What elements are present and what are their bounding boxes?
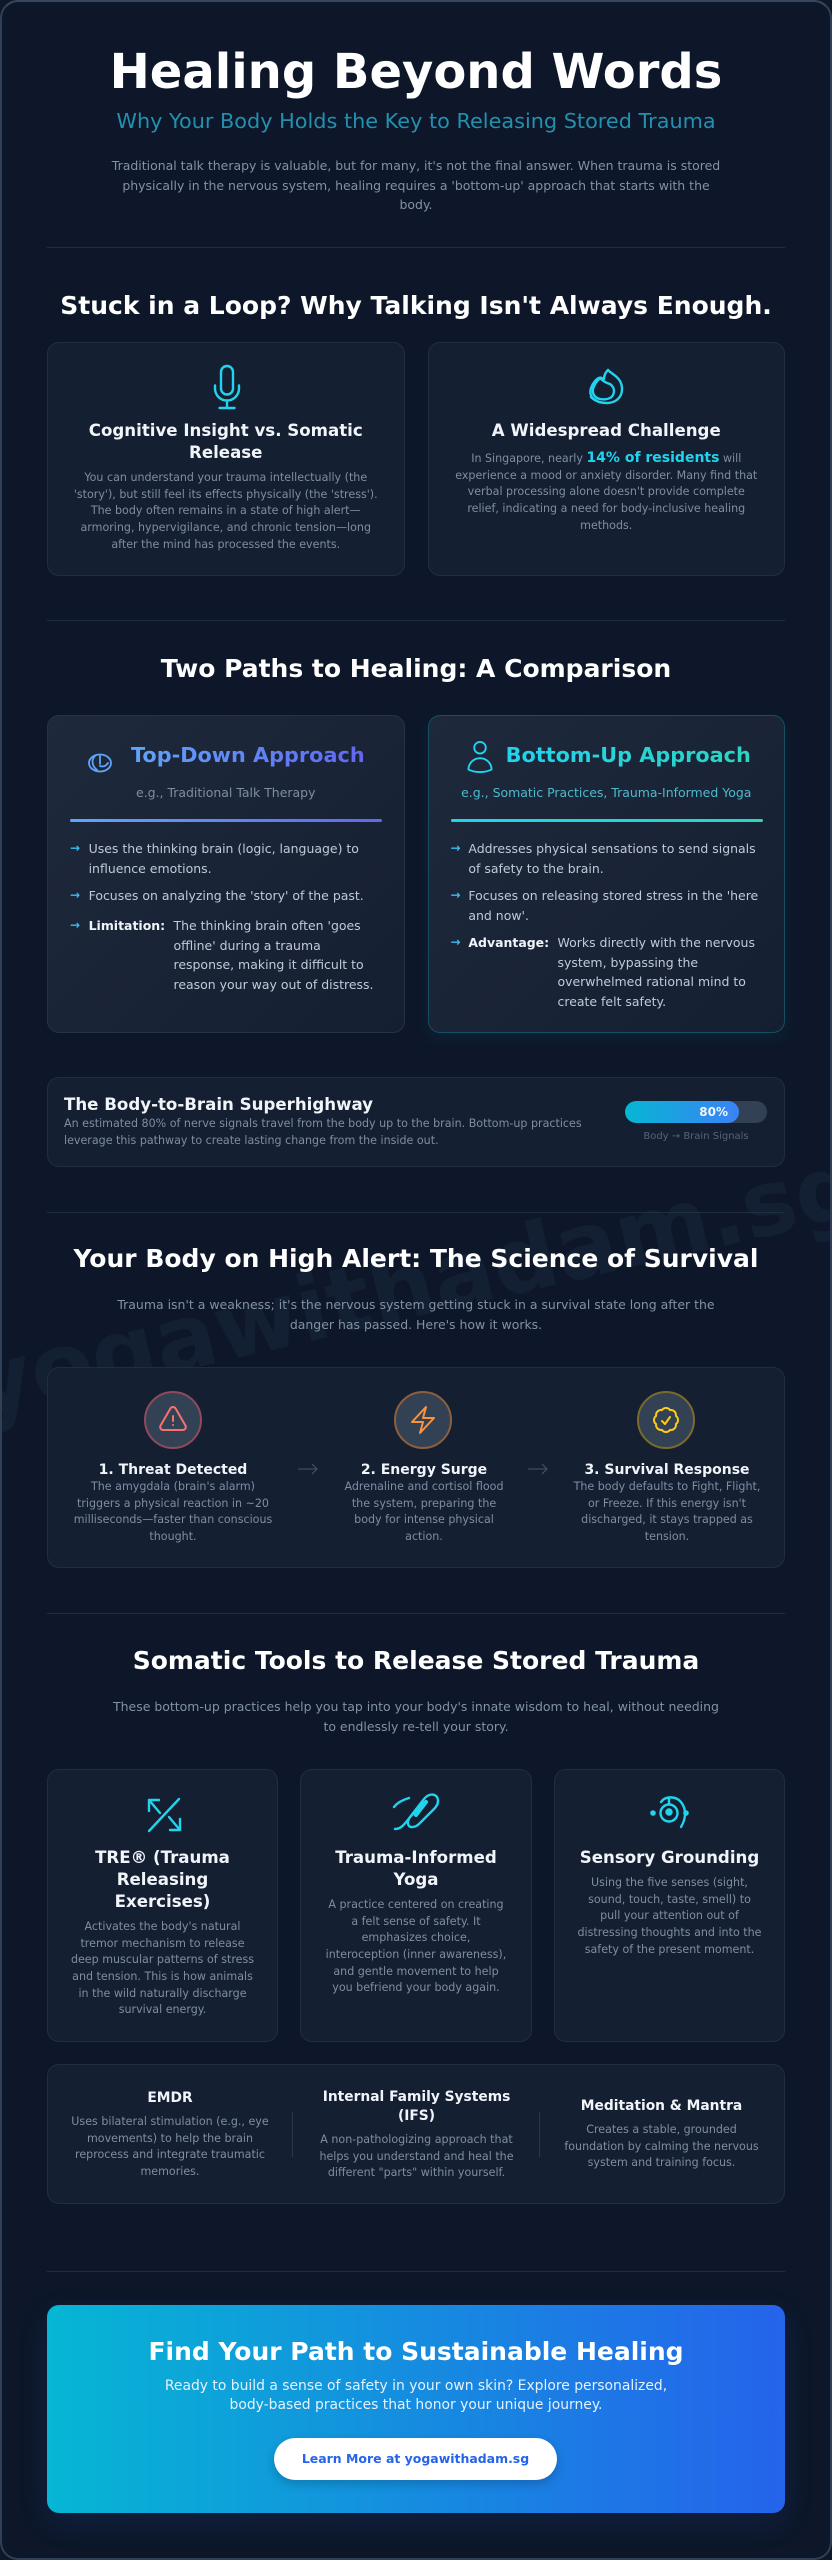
modality title: (IFS) <box>398 2108 435 2124</box>
modality text <box>319 2133 514 2179</box>
tool text: and tension. This is how animals <box>72 1970 253 1983</box>
list: → <box>70 888 80 902</box>
step text: Adrenaline and cortisol flood <box>344 1480 504 1493</box>
step text <box>74 1480 272 1543</box>
modality text <box>71 2115 269 2178</box>
tool text: pull your attention out of <box>600 1909 739 1922</box>
card text: methods. <box>580 519 632 532</box>
list: Focuses on analyzing the 'story' of the past. <box>89 888 364 903</box>
heading: high alert: Your Body on High Alert: The Science of Survival <box>74 1244 758 1273</box>
step text: triggers a physical reaction in ~20 <box>77 1497 269 1510</box>
tool text: interoception (inner awareness), <box>326 1948 506 1961</box>
tool title: Sensory Grounding <box>580 1848 759 1867</box>
tool title: Yoga <box>393 1870 439 1889</box>
list: Advantage: <box>468 935 549 950</box>
step 2 <box>344 1391 504 1543</box>
step text: body for intense physical <box>354 1513 494 1526</box>
tool text: Activates the body's natural <box>85 1920 240 1933</box>
tool text: a felt sense of safety. It <box>351 1915 481 1928</box>
panel: trauma-informed yoga <box>300 1769 532 2042</box>
modality text: Uses bilateral stimulation (e.g., eye <box>71 2115 269 2128</box>
card text <box>74 471 378 551</box>
step title: 3. Survival Response <box>584 1462 750 1478</box>
list: → <box>450 935 461 949</box>
tool text: safety of the present moment. <box>585 1943 754 1956</box>
tool text: emphasizes choice, <box>362 1931 470 1944</box>
modality title: EMDR <box>147 2090 193 2106</box>
modality title: Meditation & Mantra <box>581 2098 742 2114</box>
panel: survival process <box>47 1367 785 1568</box>
approach subtitle: e.g., Somatic Practices, Trauma-Informed Yoga <box>461 785 751 800</box>
cta heading: Find Your Path to Sustainable Healing <box>148 2337 684 2366</box>
tool title: Releasing <box>117 1870 208 1889</box>
list <box>70 841 373 992</box>
icon: bolt <box>394 1391 452 1449</box>
cta text <box>165 2378 667 2413</box>
step text: The amygdala (brain's alarm) <box>91 1480 255 1493</box>
panel: sensory grounding <box>554 1769 785 2042</box>
tool text <box>71 1920 254 2016</box>
tool text: deep muscular patterns of stress <box>71 1953 254 1966</box>
modality text: A non-pathologizing approach that <box>320 2133 513 2146</box>
modality text: memories. <box>140 2165 200 2178</box>
bar caption: Body → Brain Signals <box>643 1131 749 1142</box>
modality title: Internal Family Systems <box>323 2089 510 2105</box>
card text: You can understand your trauma intellectually (the <box>84 471 367 484</box>
step text: or Freeze. If this energy isn't <box>588 1497 746 1510</box>
step 3 <box>574 1391 760 1543</box>
modality text: system and training focus. <box>588 2156 735 2169</box>
icon: user <box>468 741 492 773</box>
somatic tools intro: These bottom-up practices help you tap into your body's innate wisdom to heal, without needing <box>113 1699 719 1714</box>
list: → <box>450 888 461 902</box>
card text <box>455 450 757 532</box>
intro text: Traditional talk therapy is valuable, but for many, it's not the final answer. When trauma is stored <box>112 158 720 173</box>
list: → <box>70 918 80 932</box>
panel: body-to-brain superhighway <box>47 1077 785 1167</box>
high alert intro: danger has passed. Here's how it works. <box>290 1316 542 1332</box>
superhighway text: An estimated 80% of nerve signals travel from the body up to the brain. Bottom-up practices <box>64 1117 582 1130</box>
icon: brain <box>88 754 112 772</box>
step text: thought. <box>149 1530 197 1543</box>
icon: warning <box>144 1391 202 1449</box>
heading: stuck in a loop: Stuck in a Loop? Why Talking Isn't Always Enough. <box>60 291 772 320</box>
approach heading: Bottom-Up Approach <box>506 743 751 767</box>
intro text <box>112 158 720 212</box>
list: offline' during a trauma <box>174 938 321 952</box>
card text: experience a mood or anxiety disorder. Many find that <box>455 469 757 482</box>
list: of safety to the brain. <box>468 860 604 876</box>
card title: Cognitive Insight vs. Somatic <box>89 421 363 440</box>
modality text: helps you understand and heal the <box>319 2150 514 2163</box>
list: The thinking brain often 'goes <box>174 918 361 933</box>
step text: the system, preparing the <box>352 1497 496 1510</box>
tool text: in the wild naturally discharge <box>78 1987 247 2000</box>
card text: relief, indicating a need for body-inclusive healing <box>467 502 745 515</box>
tool title: Exercises) <box>115 1892 210 1911</box>
tool text <box>578 1876 761 1956</box>
subtitle: Why Your Body Holds the Key to Releasing Stored Trauma <box>116 109 716 133</box>
high alert intro <box>117 1297 715 1332</box>
cta button: Learn More at yogawithadam.sg <box>302 2451 529 2466</box>
step 1 <box>74 1391 272 1543</box>
list: and now'. <box>468 908 529 922</box>
progress bar 80% <box>625 1101 767 1123</box>
modality: IFS <box>319 2089 514 2179</box>
modality: EMDR <box>71 2090 269 2178</box>
cta text: body-based practices that honor your unique journey. <box>230 2397 602 2413</box>
list: Focuses on releasing stored stress in the 'here <box>468 888 758 903</box>
modality: meditation <box>564 2098 759 2169</box>
somatic tools intro: to endlessly re-tell your story. <box>323 1718 509 1734</box>
list: overwhelmed rational mind to <box>558 974 746 989</box>
tool title <box>335 1848 497 1889</box>
cta text: Ready to build a sense of safety in your own skin? Explore personalized, <box>165 2378 667 2394</box>
step text <box>574 1480 760 1543</box>
somatic tools intro <box>112 1699 719 1734</box>
progress bar 80%: 80% <box>699 1105 728 1119</box>
step text <box>344 1480 504 1543</box>
step text: discharged, it stays trapped as <box>581 1513 753 1526</box>
high alert intro: Trauma isn't a weakness; it's the nervous system getting stuck in a survival state long after the <box>117 1297 715 1312</box>
tool text: A practice centered on creating <box>328 1898 504 1911</box>
list <box>450 841 758 1008</box>
tool text: Using the five senses (sight, <box>591 1876 748 1889</box>
modality text: movements) to help the brain <box>87 2132 253 2145</box>
tool text <box>326 1898 506 1994</box>
cta button <box>274 2438 557 2480</box>
intro text: body. <box>399 197 433 212</box>
list: influence emotions. <box>89 860 212 876</box>
step text: tension. <box>645 1530 689 1543</box>
icon: check badge <box>637 1391 695 1449</box>
tool title: TRE® (Trauma <box>95 1848 230 1867</box>
list: system, bypassing the <box>558 954 698 970</box>
title: Healing Beyond Words <box>110 44 722 100</box>
card title: Release <box>189 443 262 462</box>
heading: somatic tools: Somatic Tools to Release Stored Trauma <box>133 1646 699 1675</box>
tool text: survival energy. <box>119 2003 206 2016</box>
card title <box>89 421 363 462</box>
tool text: sound, touch, taste, smell) to <box>588 1893 751 1906</box>
step text: The body defaults to Fight, Flight, <box>574 1480 760 1493</box>
intro text: physically in the nervous system, healing requires a 'bottom-up' approach that starts with the <box>122 178 710 192</box>
list: response, making it difficult to <box>174 957 364 972</box>
arrow <box>298 1464 318 1474</box>
tool title: Trauma-Informed <box>335 1848 497 1867</box>
list: Uses the thinking brain (logic, language) to <box>89 841 359 856</box>
list: reason your way out of distress. <box>174 976 373 992</box>
icon: paperclip <box>392 1793 440 1830</box>
card text: verbal processing alone doesn't provide complete <box>468 485 745 498</box>
approach subtitle: e.g., Traditional Talk Therapy <box>136 785 315 800</box>
panel: TRE <box>47 1769 278 2042</box>
panel: call to action <box>47 2305 785 2513</box>
panel: widespread challenge <box>428 342 785 576</box>
step title: 1. Threat Detected <box>99 1462 247 1478</box>
modality text <box>564 2123 759 2169</box>
panel: bottom-up approach <box>428 715 785 1033</box>
card text: In Singapore, nearly 14% of residents will <box>471 450 741 466</box>
panel: additional modalities <box>47 2064 785 2204</box>
list: Addresses physical sensations to send signals <box>468 841 756 856</box>
heading: two paths: Two Paths to Healing: A Comparison <box>161 654 671 683</box>
icon: microphone <box>214 364 240 410</box>
tool text: distressing thoughts and into the <box>578 1926 761 1939</box>
gradient divider <box>450 819 762 822</box>
icon: flame <box>589 368 624 404</box>
tool text: tremor mechanism to release <box>80 1937 245 1950</box>
step text: action. <box>405 1530 443 1543</box>
modality text: different "parts" within yourself. <box>328 2166 505 2179</box>
list: Works directly with the nervous <box>558 935 755 950</box>
step title: 2. Energy Surge <box>361 1462 487 1478</box>
panel: top-down approach <box>47 715 404 1033</box>
icon: sensory target <box>650 1796 689 1828</box>
superhighway text: leverage this pathway to create lasting change from the inside out. <box>64 1134 439 1147</box>
icon: shake arrows <box>148 1798 182 1832</box>
modality text: reprocess and integrate traumatic <box>75 2148 265 2161</box>
gradient divider <box>70 819 382 822</box>
superhighway title: The Body-to-Brain Superhighway <box>64 1095 373 1114</box>
approach heading: Top-Down Approach <box>131 743 365 767</box>
card text: after the mind has processed the events. <box>111 538 340 551</box>
card title: A Widespread Challenge <box>492 421 721 440</box>
list: Limitation: <box>89 918 165 933</box>
panel: cognitive insight <box>47 342 404 576</box>
card text: 'story'), but still feel its effects physically (the 'stress'). <box>74 488 378 501</box>
step text: milliseconds—faster than conscious <box>74 1513 272 1526</box>
modality text: Creates a stable, grounded <box>586 2123 737 2136</box>
list: → <box>450 841 461 855</box>
card text: armoring, hypervigilance, and chronic tension—long <box>80 521 371 534</box>
modality title <box>323 2089 510 2124</box>
list: → <box>70 841 80 855</box>
tool text: you befriend your body again. <box>332 1981 500 1994</box>
list: create felt safety. <box>558 994 666 1008</box>
arrow <box>528 1464 548 1474</box>
card text: The body often remains in a state of high alert— <box>91 504 361 517</box>
tool text: and gentle movement to help <box>333 1965 499 1978</box>
superhighway text <box>64 1117 582 1147</box>
tool title <box>95 1848 230 1911</box>
modality text: foundation by calming the nervous <box>564 2140 759 2153</box>
